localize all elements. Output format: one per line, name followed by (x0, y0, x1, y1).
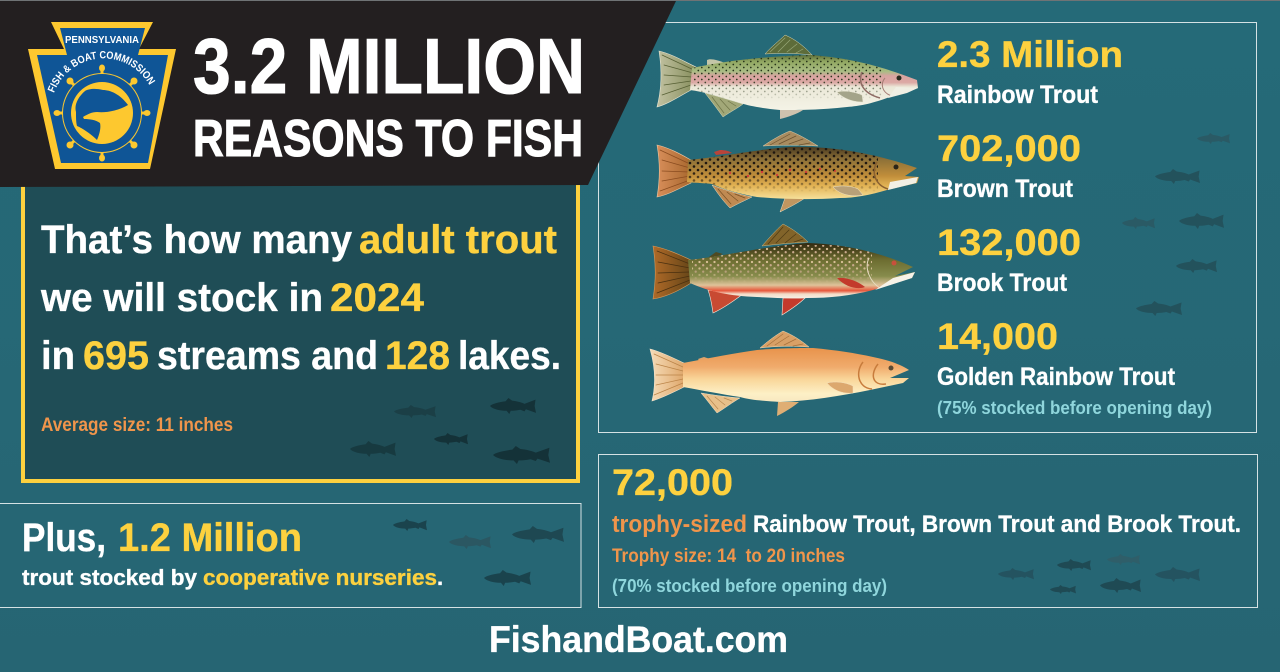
title banner (0, 1, 676, 187)
trophy description: Rainbow Trout, Brown Trout and Brook Trout. (753, 511, 1241, 538)
average size note: Average size: 11 inches (41, 415, 233, 436)
stock text line 2: 2024 (330, 276, 425, 320)
species: golden rainbow (937, 316, 1212, 418)
plus heading (22, 516, 302, 560)
stock text line 2: we will stock in (40, 276, 323, 320)
plus heading: 1.2 Million (118, 516, 302, 560)
species: golden rainbow: Golden Rainbow Trout (937, 363, 1176, 391)
title line 2: REASONS TO FISH (193, 110, 583, 168)
stock text line 3: in (41, 334, 75, 378)
plus subtext (22, 565, 443, 590)
trophy size: Trophy size: 14 to 20 inches (612, 546, 845, 567)
logo: ship wheel (54, 64, 150, 162)
panel: stocking summary (23, 170, 578, 481)
species: golden rainbow: (75% stocked before opening day) (937, 398, 1212, 418)
panel: cooperative nurseries (0, 504, 581, 608)
stock text line 3 (41, 334, 561, 378)
trophy count: 72,000 (612, 462, 733, 503)
logo: arc text (54, 58, 153, 93)
species: brown (937, 128, 1081, 203)
plus subtext: . (437, 565, 443, 590)
species: rainbow: Rainbow Trout (937, 81, 1099, 109)
logo: keystone: FISH & BOAT COMMISSION (48, 51, 156, 92)
panel: trout species (598, 22, 1256, 432)
stock text line 1 (41, 218, 557, 262)
logo: keystone (28, 22, 176, 169)
stock text line 3: 128 (385, 334, 450, 378)
stock text line 3: 695 (83, 334, 149, 378)
species: brook (937, 222, 1081, 297)
fish silhouettes (998, 554, 1200, 594)
golden rainbow trout illustration (650, 331, 909, 416)
plus subtext: trout stocked by (22, 565, 198, 590)
logo: pennsylvania text: PENNSYLVANIA (65, 34, 139, 46)
title line 1: 3.2 MILLION (193, 22, 585, 110)
website: FishandBoat.com (489, 619, 788, 660)
stock text line 3: lakes. (458, 334, 561, 378)
panel: trophy trout (598, 454, 1258, 608)
fish silhouettes (1122, 133, 1230, 316)
species: brown: 702,000 (937, 128, 1081, 169)
logo: fish (75, 89, 128, 140)
stock text line 1: adult trout (359, 218, 557, 262)
stock text line 3: streams and (157, 334, 378, 378)
fish silhouettes (393, 519, 564, 586)
trophy description: trophy-sized (612, 511, 747, 538)
species: rainbow (937, 34, 1123, 109)
species: golden rainbow: 14,000 (937, 316, 1058, 357)
species: brook: 132,000 (937, 222, 1081, 263)
brown trout illustration (657, 131, 919, 212)
fish silhouettes (350, 398, 550, 464)
species: brook: Brook Trout (937, 269, 1068, 297)
plus subtext: cooperative nurseries (203, 565, 437, 590)
stock text line 1: That’s how many (41, 218, 353, 262)
species: rainbow: 2.3 Million (937, 34, 1123, 75)
trophy stocking note: (70% stocked before opening day) (612, 576, 887, 596)
species: brown: Brown Trout (937, 175, 1074, 203)
plus heading: Plus, (22, 516, 106, 560)
rainbow trout illustration (657, 35, 918, 119)
brook trout illustration (653, 224, 915, 315)
